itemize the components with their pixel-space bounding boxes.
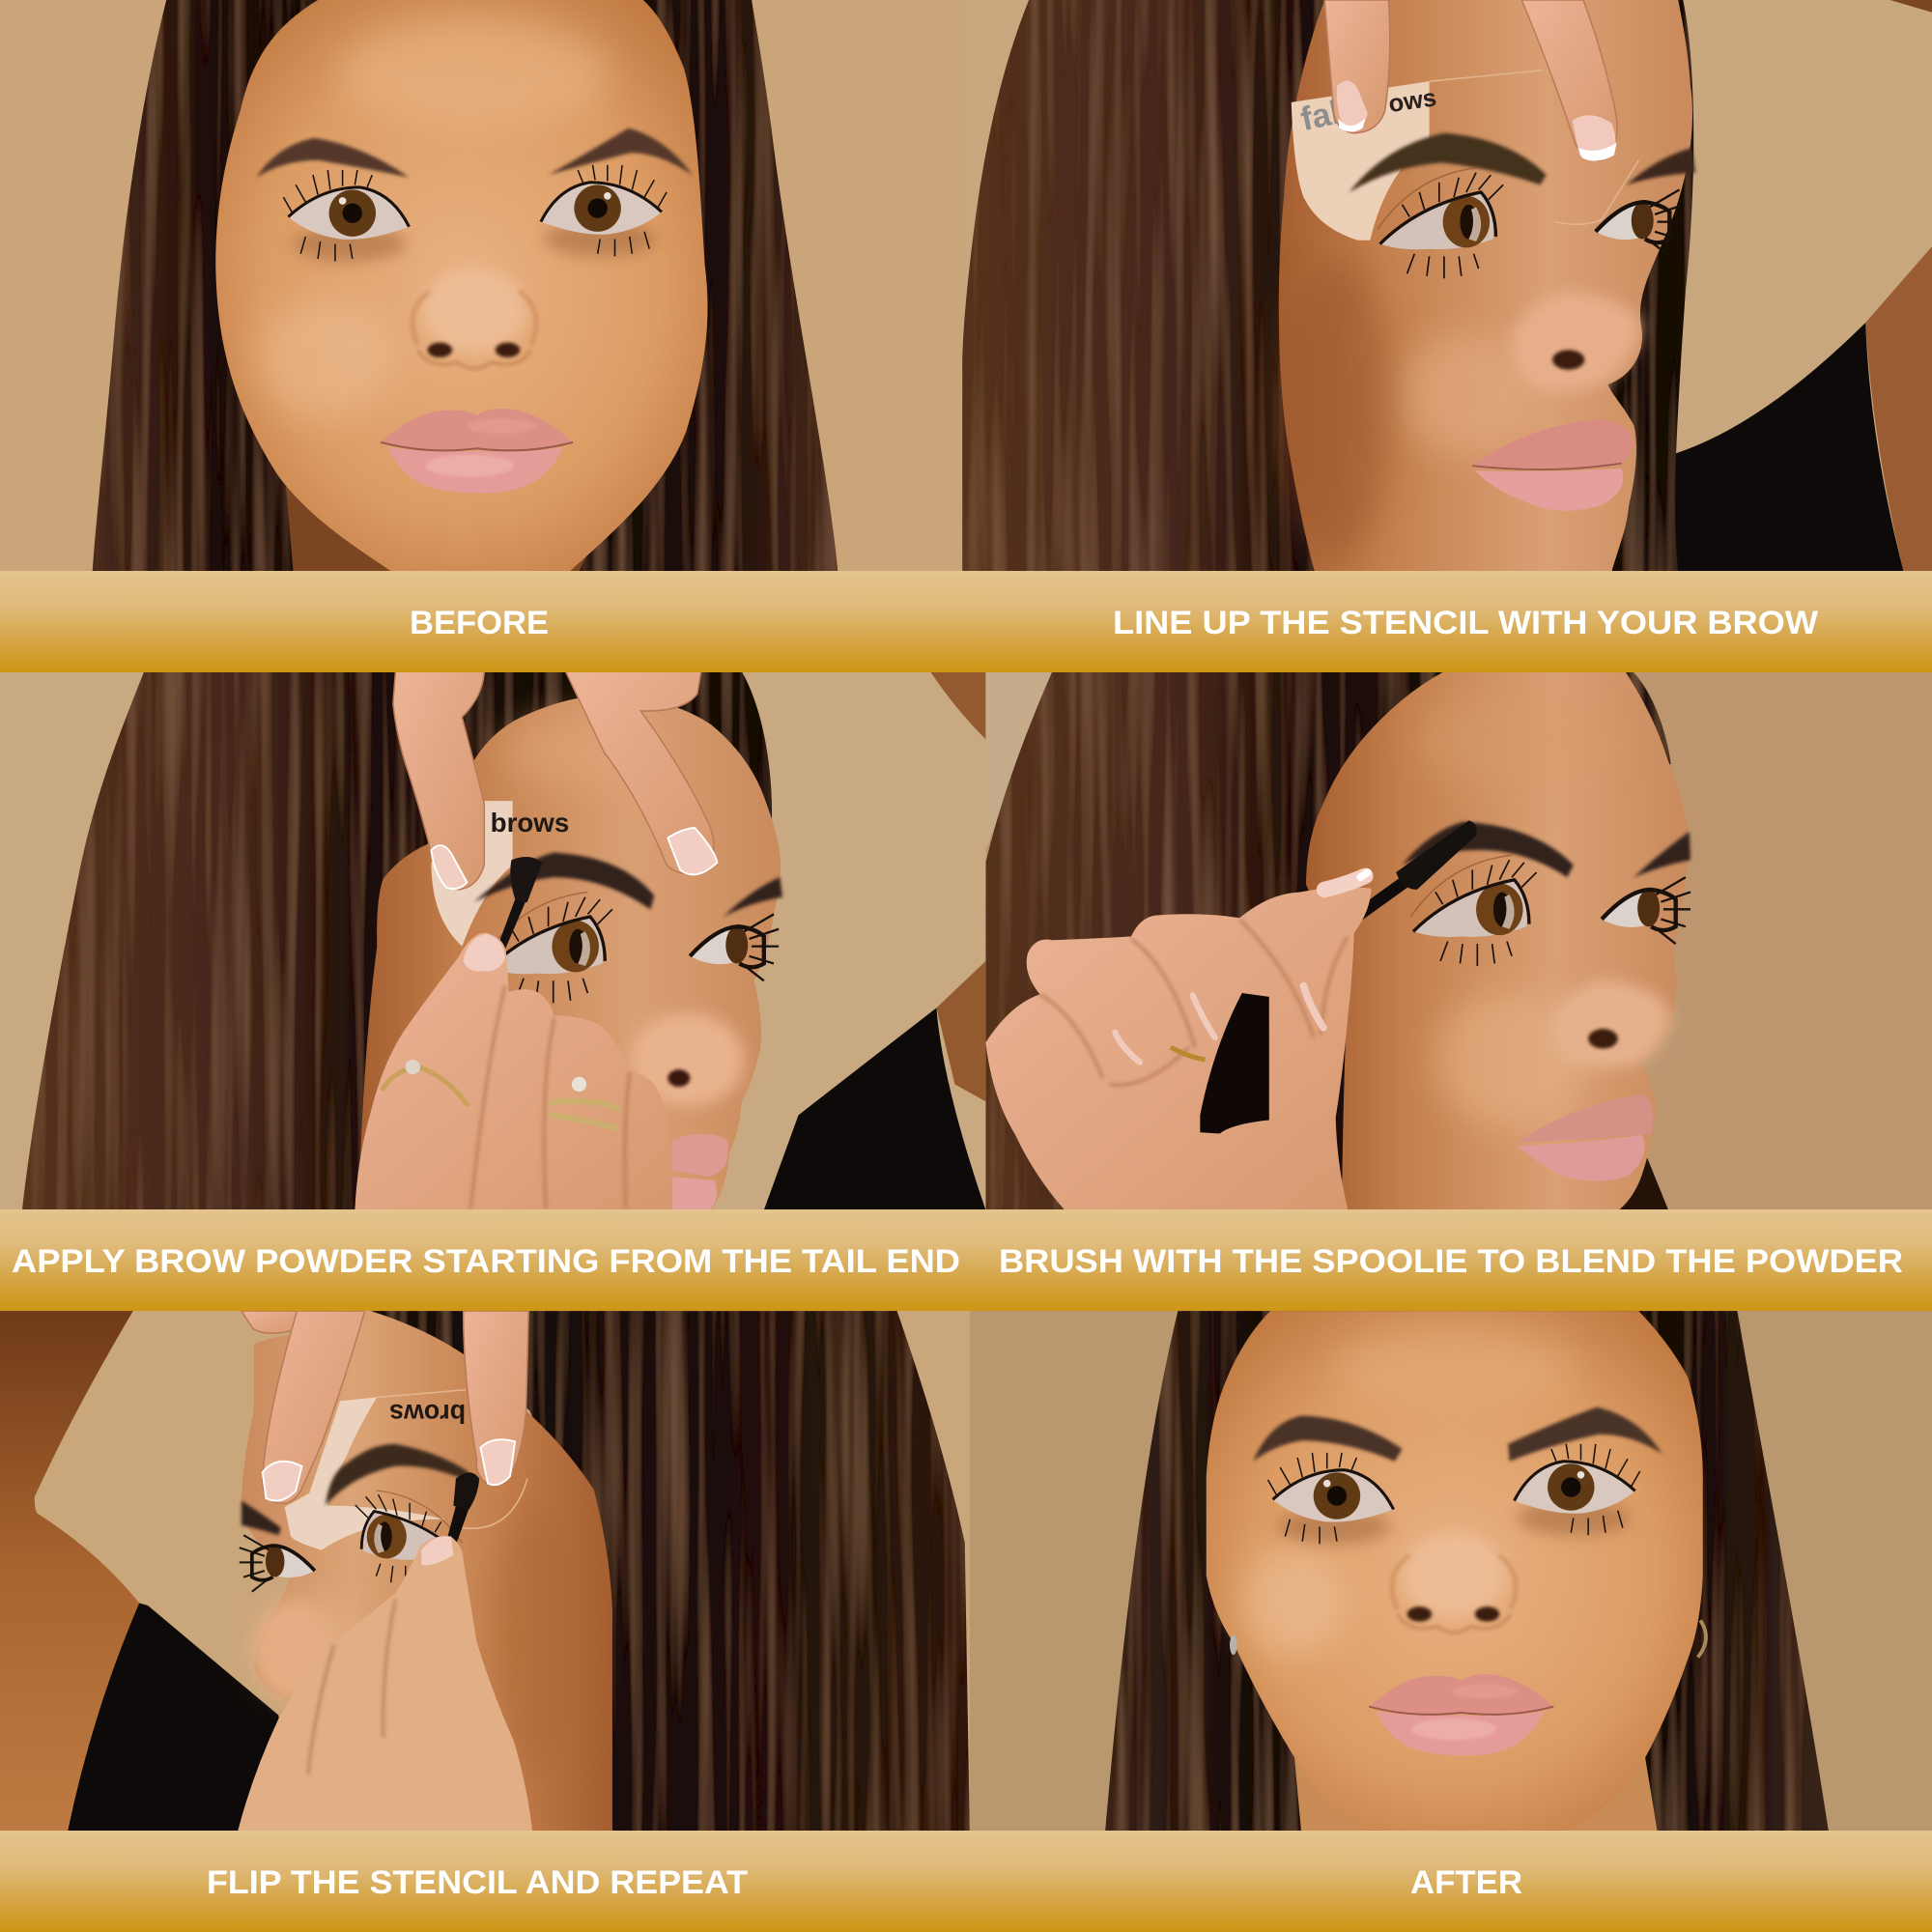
arm — [930, 671, 985, 1101]
far eye — [240, 1535, 315, 1592]
hair — [985, 671, 1671, 1210]
far brow — [1634, 832, 1690, 877]
panel: apply brow powder photo — [0, 671, 985, 1210]
stencil — [1292, 71, 1638, 241]
left brow — [256, 138, 409, 178]
nails — [1115, 872, 1368, 1062]
brush — [446, 1472, 479, 1545]
panel: before photo — [93, 0, 838, 571]
caption band: powder and spoolie: APPLY BROW POWDER STARTING FROM THE TAIL END — [12, 1243, 960, 1280]
earrings — [1230, 1620, 1706, 1658]
nose — [1392, 1533, 1516, 1633]
caption band: flip and after — [0, 1831, 1932, 1932]
eye — [355, 1491, 462, 1584]
hair — [962, 0, 1693, 572]
eye — [1267, 1453, 1394, 1544]
far eye — [1602, 877, 1690, 944]
face — [1306, 671, 1690, 1210]
background — [0, 671, 985, 1210]
stencil logo — [1297, 84, 1438, 138]
background — [970, 1310, 1932, 1831]
nose — [412, 269, 536, 368]
nails — [431, 828, 717, 889]
caption band: before: BEFORE — [410, 605, 549, 641]
hair — [371, 1311, 970, 1831]
far hair bottom — [1602, 1152, 1668, 1210]
black top — [764, 1008, 985, 1210]
brow — [1350, 133, 1547, 192]
caption band: powder and spoolie — [0, 1209, 1932, 1311]
panel: line up the stencil photo — [961, 0, 1932, 572]
hand — [985, 887, 1372, 1210]
background — [985, 671, 1932, 1210]
face — [358, 695, 781, 1210]
applying hand — [238, 1536, 532, 1831]
far brow — [724, 877, 782, 917]
brow — [1403, 822, 1574, 877]
stencil hand fingers — [393, 671, 714, 890]
fingers — [242, 1311, 528, 1503]
caption band: flip and after: AFTER — [1410, 1864, 1522, 1901]
lips — [671, 1134, 728, 1210]
caption band: flip and after: FLIP THE STENCIL AND REPEAT — [207, 1864, 748, 1901]
stencil logo: brows — [389, 1399, 466, 1429]
stencil logo: ows — [1387, 84, 1438, 118]
nails — [263, 1439, 515, 1501]
right brow — [549, 128, 693, 175]
right brow — [1508, 1407, 1662, 1462]
face — [215, 0, 708, 572]
lips — [1472, 419, 1634, 511]
hair — [93, 0, 838, 572]
stencil — [285, 1390, 527, 1550]
lips — [1369, 1674, 1553, 1755]
applying hand — [355, 933, 672, 1210]
nose — [631, 1012, 744, 1106]
lips — [381, 409, 573, 494]
brow — [474, 853, 654, 909]
caption band: before — [0, 571, 1932, 672]
fingers — [1324, 0, 1617, 160]
panel: after photo — [970, 1310, 1932, 1831]
eye — [487, 892, 612, 1003]
hair — [22, 671, 772, 1210]
eye — [541, 165, 667, 256]
arm — [1865, 246, 1932, 572]
far eye — [690, 914, 779, 980]
stencil logo: brows — [491, 808, 569, 838]
nose — [1550, 980, 1671, 1068]
nose — [1511, 291, 1641, 392]
far brow — [1627, 148, 1695, 185]
ring — [1171, 1047, 1205, 1060]
eye — [1378, 167, 1503, 278]
nose — [254, 1605, 332, 1698]
eye — [1515, 1444, 1640, 1535]
eye — [1410, 855, 1537, 966]
far brow — [242, 1501, 281, 1535]
neck — [286, 487, 604, 572]
nails — [1337, 80, 1616, 161]
panel: spoolie blending photo — [985, 671, 1932, 1210]
hair — [1105, 1311, 1829, 1831]
spoolie handle — [1300, 876, 1409, 958]
brush — [496, 857, 542, 955]
black top — [1663, 323, 1904, 572]
background — [0, 0, 962, 572]
eye — [283, 170, 409, 261]
face — [1207, 1311, 1703, 1831]
background — [961, 0, 1932, 572]
brow — [326, 1444, 469, 1506]
left brow — [1253, 1416, 1403, 1462]
black top — [68, 1603, 296, 1831]
rings — [382, 1060, 620, 1128]
arm — [0, 1311, 139, 1831]
caption band: before: LINE UP THE STENCIL WITH YOUR BROW — [1113, 605, 1819, 641]
face — [1279, 0, 1692, 572]
stencil — [431, 801, 513, 947]
caption band: powder and spoolie: BRUSH WITH THE SPOOLIE TO BLEND THE POWDER — [999, 1243, 1903, 1280]
stencil logo: fal — [1297, 95, 1343, 138]
neck — [1293, 1749, 1658, 1831]
lips — [1517, 1094, 1653, 1181]
background — [0, 1310, 970, 1831]
face — [242, 1311, 612, 1831]
far eye — [1596, 189, 1685, 256]
spoolie brush — [1396, 820, 1477, 890]
left background strip — [985, 671, 1052, 850]
panel: flip the stencil photo — [0, 1310, 970, 1831]
